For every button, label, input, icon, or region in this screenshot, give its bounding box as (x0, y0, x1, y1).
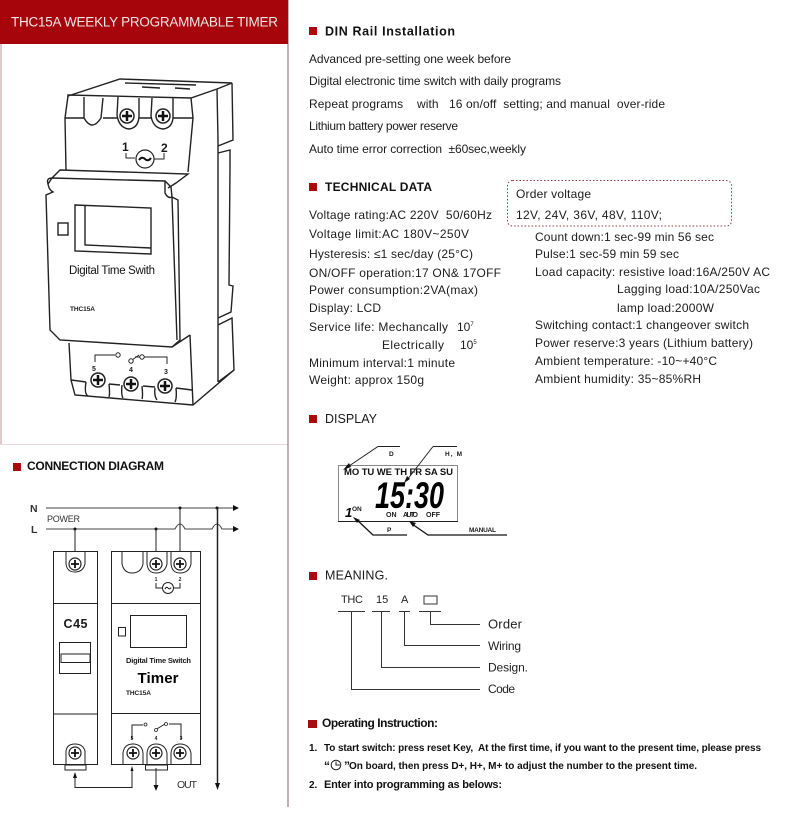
program indicator: ON (352, 506, 362, 513)
lower terminal screws and relay contact: 4 (129, 367, 133, 374)
model code breakdown: 15 (376, 594, 388, 606)
model code breakdown: Wiring (488, 639, 521, 653)
timer module: 5 (131, 736, 134, 742)
technical data: left column: Minimum interval:1 minute (309, 356, 455, 370)
technical data: left column: Power consumption:2VA(max) (309, 283, 478, 297)
timer module: THC15A (126, 690, 151, 697)
technical data: left column: Hysteresis: ≤1 sec/day (25°C) (309, 247, 473, 261)
wiring diagram (30, 503, 239, 791)
technical data: left column: Display: LCD (309, 301, 381, 315)
LCD display diagram (338, 446, 507, 535)
program indicator (345, 505, 362, 520)
technical data: left column: Electrically (382, 338, 444, 352)
callout: order voltage: Order voltage (516, 187, 591, 201)
leader MANUAL (409, 521, 507, 535)
leader H, M (404, 446, 462, 483)
device label: Digital Time Swith (69, 265, 155, 277)
technical data: left column: ON/OFF operation:17 ON& 17OFF (309, 266, 501, 280)
feature list: Digital electronic time switch with daily programs (309, 74, 561, 88)
technical data: right column: Count down:1 sec-99 min 56 sec (535, 230, 714, 244)
power terminal symbol 1 ~ 2: 2 (161, 141, 168, 155)
technical data: left column: Weight: approx 150g (309, 373, 424, 387)
operating steps: Enter into programming as belows: (324, 779, 502, 791)
heading: operating instruction: Operating Instruction: (322, 716, 438, 730)
heading: technical data: TECHNICAL DATA (325, 180, 432, 194)
feature list: Lithium battery power reserve (309, 119, 458, 133)
power lines N and L (30, 503, 239, 790)
technical data: right column (535, 230, 770, 386)
title banner (0, 0, 288, 44)
model code breakdown: Design. (488, 660, 528, 674)
timer module: 3 (180, 736, 183, 742)
title banner: THC15A WEEKLY PROGRAMMABLE TIMER (11, 14, 278, 30)
operating steps: 2. (309, 780, 318, 791)
circuit breaker C45 (53, 551, 98, 770)
leader D (343, 446, 400, 470)
timer module: 1 (155, 577, 158, 583)
technical data: left column (309, 208, 501, 387)
technical data: left column: Voltage rating:AC 220V 50/60Hz (309, 208, 492, 222)
status indicator square (58, 223, 68, 235)
lower terminal screws and relay contact (91, 353, 172, 393)
heading: display: DISPLAY (325, 412, 378, 426)
feature list: Advanced pre-setting one week before (309, 52, 511, 66)
timer module: Timer (138, 670, 179, 687)
technical data: left column: 10 (457, 320, 470, 334)
leader P: P (387, 527, 392, 534)
model code breakdown: A (401, 594, 409, 606)
output wiring arrows: OUT (177, 779, 198, 791)
leader H, M: H, M (445, 451, 462, 458)
power lines N and L: POWER (47, 514, 80, 524)
power lines N and L: N (30, 503, 38, 515)
top terminal screws (120, 109, 170, 123)
technical data: right column: lamp load:2000W (617, 301, 715, 315)
device illustration: timer on DIN rail (46, 79, 234, 405)
lower terminal screws and relay contact: 3 (164, 369, 168, 376)
circuit breaker C45: C45 (64, 617, 88, 631)
device model: THC15A (70, 306, 95, 313)
leader D: D (389, 451, 394, 458)
model code breakdown (338, 594, 528, 696)
heading: connection diagram: CONNECTION DIAGRAM (27, 459, 164, 473)
operating steps: On board, then press D+, H+, M+ to adjust the number to the present time. (349, 761, 697, 772)
output wiring arrows (73, 766, 198, 791)
heading: meaning: MEANING. (325, 568, 388, 582)
operating steps (309, 743, 761, 791)
feature list: Repeat programs with 16 on/off setting; and manual over-ride (309, 97, 665, 111)
mode labels: OFF (426, 512, 441, 519)
callout: order voltage (508, 180, 732, 226)
technical data: right column: Pulse:1 sec-59 min 59 sec (535, 247, 679, 261)
technical data: right column: Switching contact:1 changeover switch (535, 318, 749, 332)
technical data: left column: 5 (473, 340, 477, 346)
feature list: Auto time error correction ±60sec,weekly (309, 142, 526, 156)
technical data: right column: Power reserve:3 years (Lithium battery) (535, 336, 753, 350)
LCD window (75, 205, 151, 254)
weekday row: MO TU WE TH FR SA SU (344, 467, 453, 478)
operating steps: “ (324, 759, 330, 773)
icon: clock symbol (331, 760, 341, 770)
technical data: right column: Lagging load:10A/250Vac (617, 282, 760, 296)
mode labels: ON (386, 512, 396, 519)
operating steps: To start switch: press reset Key, At the first time, if you want to the present time, please press (324, 743, 761, 754)
power terminal symbol 1 ~ 2 (122, 140, 168, 168)
technical data: left column: 10 (460, 338, 473, 352)
model code breakdown: Order (488, 616, 523, 632)
leader P (353, 517, 407, 535)
model code breakdown: Code (488, 682, 515, 696)
technical data: right column: Load capacity: resistive load:16A/250V AC (535, 265, 770, 279)
heading: DIN rail installation: DIN Rail Installation (325, 24, 455, 38)
mode labels (386, 512, 441, 519)
callout: order voltage: 12V, 24V, 36V, 48V, 110V; (516, 208, 662, 222)
technical data: right column: Ambient temperature: -10~+40°C (535, 354, 717, 368)
timer module: 4 (155, 736, 158, 742)
power terminal symbol 1 ~ 2: 1 (122, 140, 129, 154)
model code breakdown: THC (341, 594, 363, 606)
timer module: Digital Time Switch (126, 656, 191, 665)
technical data: right column: Ambient humidity: 35~85%RH (535, 372, 701, 386)
power lines N and L: L (31, 524, 38, 536)
technical data: left column: Service life: Mechancally (309, 320, 448, 334)
program indicator: 1 (345, 505, 352, 520)
mode labels: AUTO (403, 512, 419, 519)
feature list (309, 52, 665, 156)
leader MANUAL: MANUAL (469, 527, 496, 534)
technical data: left column: 7 (470, 322, 474, 328)
timer module: 2 (179, 577, 182, 583)
timer module (111, 551, 200, 770)
lower terminal block (69, 335, 234, 405)
technical data: left column: Voltage limit:AC 180V~250V (309, 227, 469, 241)
time readout: 15:30 (375, 475, 444, 516)
lower terminal screws and relay contact: 5 (92, 366, 96, 373)
operating steps: ” (344, 759, 350, 773)
operating steps: 1. (309, 743, 318, 754)
